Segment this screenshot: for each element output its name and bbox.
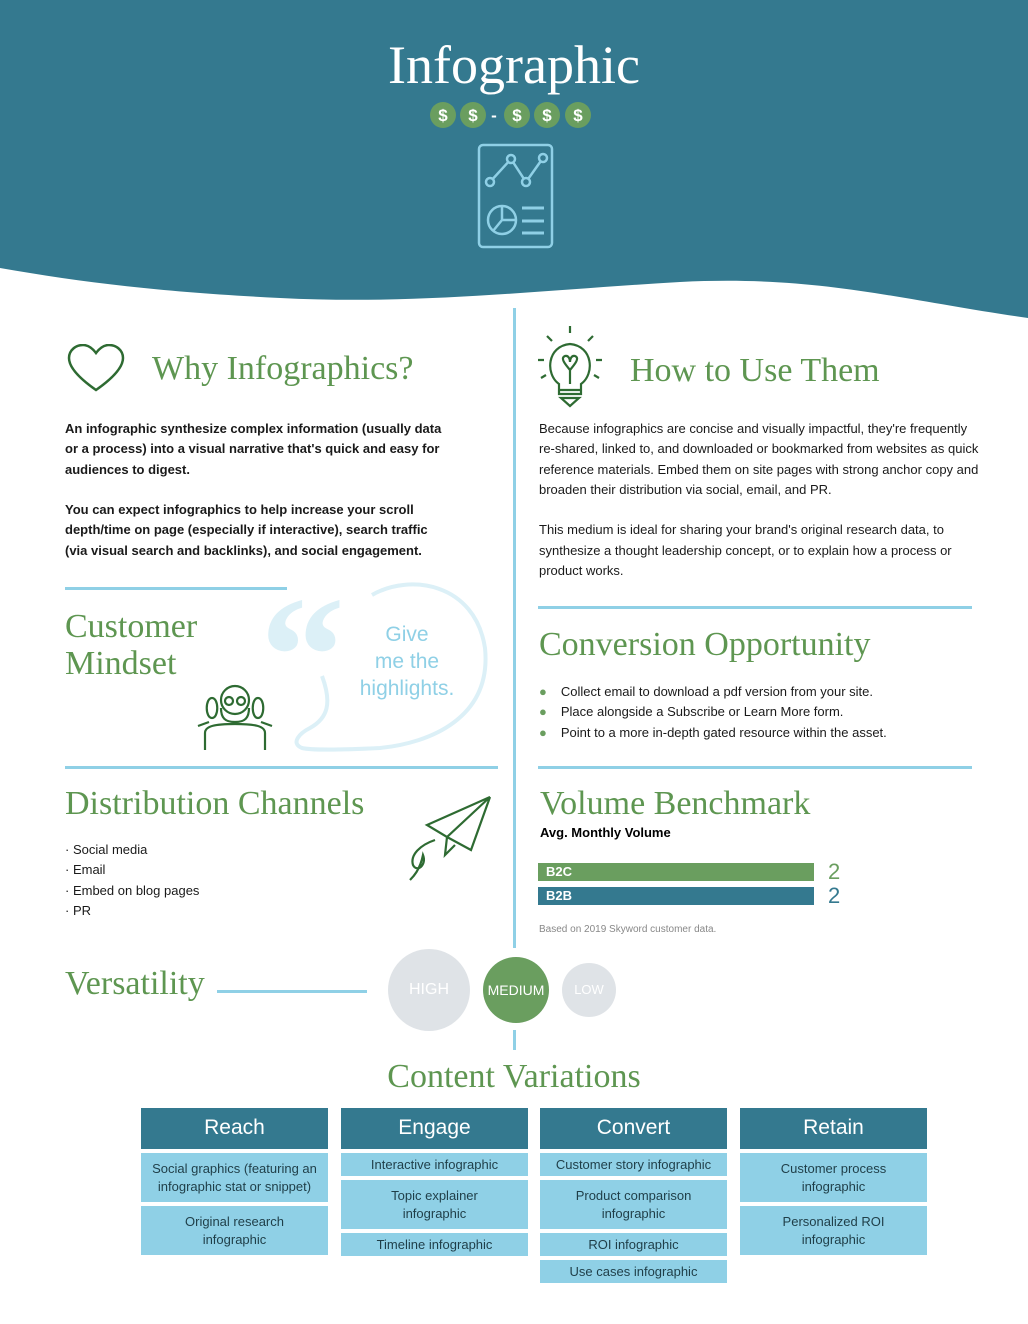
icon: heart [68, 344, 124, 392]
text: This medium is ideal for sharing your brand's original research data, to synthesize a thought leadership concept, or to explain how a process or product works. [539, 522, 952, 578]
heading: Volume Benchmark [540, 785, 810, 822]
heading: Mindset [65, 645, 176, 682]
speech bubble: Give [385, 623, 429, 646]
heading: How to Use Them [630, 352, 880, 389]
panel: why infographics [65, 344, 442, 558]
table: content variations [141, 1108, 927, 1283]
table: content variations: Use cases infographic [570, 1264, 697, 1278]
table: content variations: Convert [597, 1116, 670, 1139]
speech bubble: me the [375, 650, 439, 673]
icon: lightbulb [538, 326, 602, 408]
heading: Conversion Opportunity [539, 626, 870, 663]
panel: volume benchmark: Avg. Monthly Volume [540, 825, 671, 840]
bullets: ● Place alongside a Subscribe or Learn More form. [539, 704, 843, 719]
table: content variations: Retain [803, 1116, 864, 1139]
table: content variations: Original research infographic [185, 1214, 284, 1246]
price rating: $ [468, 106, 478, 125]
text: You can expect infographics to help increase your scroll depth/time on page (especially if interactive), search traffic (via visual search and backlinks), and social engagement. [65, 502, 428, 558]
bar chart: 2 [828, 859, 840, 884]
icon: people [198, 684, 272, 750]
bullets [539, 684, 887, 740]
list: · Email [65, 862, 105, 877]
text: Because infographics are concise and visually impactful, they're frequently re-shared, linked to, and downloaded or bookmarked from websites as quick reference materials. Embed them on site pages with strong anchor copy and broaden their distribution via social, email, and PR. [539, 421, 978, 497]
table: content variations: Product comparison infographic [576, 1188, 691, 1220]
table: content variations: ROI infographic [588, 1236, 679, 1252]
panel: conversion opportunity [539, 626, 887, 740]
heading: Versatility [65, 965, 205, 1002]
icon: report [478, 144, 554, 248]
speech bubble [260, 578, 488, 752]
text: An infographic synthesize complex information (usually data or a process) into a visual narrative that's quick and easy for audiences to digest. [65, 421, 441, 477]
table: content variations: Reach [204, 1116, 265, 1139]
icon: paper plane [409, 796, 491, 881]
divider vertical [513, 308, 516, 948]
panel: distribution channels [65, 785, 491, 918]
table: content variations: Customer story infographic [556, 1156, 711, 1172]
heading: Customer [65, 608, 197, 645]
bullets: ● Collect email to download a pdf version from your site. [539, 684, 873, 699]
bar chart: 2 [828, 883, 840, 908]
table: content variations: Personalized ROI infographic [783, 1214, 884, 1246]
bar chart: B2B [546, 888, 572, 903]
bullets: ● Point to a more in-depth gated resource within the asset. [539, 725, 887, 740]
bar chart: B2C [546, 864, 572, 879]
panel: how to use them [538, 326, 978, 578]
price rating: $ [438, 106, 448, 125]
text [65, 421, 442, 558]
list: · Embed on blog pages [65, 883, 199, 898]
table: content variations: Customer process infographic [781, 1160, 886, 1194]
rating circles: HIGH [409, 981, 449, 998]
price rating: $ [573, 106, 583, 125]
table: content variations: Engage [398, 1116, 471, 1139]
list: · Social media [65, 842, 147, 857]
price rating: - [491, 106, 497, 125]
heading: content variations: Content Variations [387, 1058, 641, 1095]
heading: Distribution Channels [65, 785, 364, 822]
price rating: $ [542, 106, 552, 125]
rating circles [388, 949, 470, 1031]
table: content variations: Topic explainer infographic [391, 1188, 478, 1220]
panel: customer mindset [65, 578, 488, 752]
panel: volume benchmark [538, 785, 840, 935]
panel: volume benchmark: Based on 2019 Skyword customer data. [539, 924, 716, 935]
list: · PR [65, 903, 91, 918]
title: Infographic [388, 35, 640, 95]
price rating: $ [512, 106, 522, 125]
text [539, 421, 978, 578]
bar chart [538, 859, 840, 908]
panel: versatility [65, 949, 616, 1031]
price rating [430, 102, 591, 128]
header background [0, 0, 1028, 318]
table: content variations: Interactive infographic [371, 1156, 498, 1172]
panel: versatility: MEDIUM [488, 982, 544, 998]
panel: versatility: LOW [574, 982, 604, 997]
heading [65, 608, 197, 682]
heading: Why Infographics? [152, 350, 414, 387]
list [65, 842, 199, 918]
table: content variations: Social graphics (featuring an infographic stat or snippet) [152, 1160, 317, 1194]
speech bubble: highlights. [360, 677, 454, 700]
table: content variations: Timeline infographic [377, 1236, 492, 1252]
